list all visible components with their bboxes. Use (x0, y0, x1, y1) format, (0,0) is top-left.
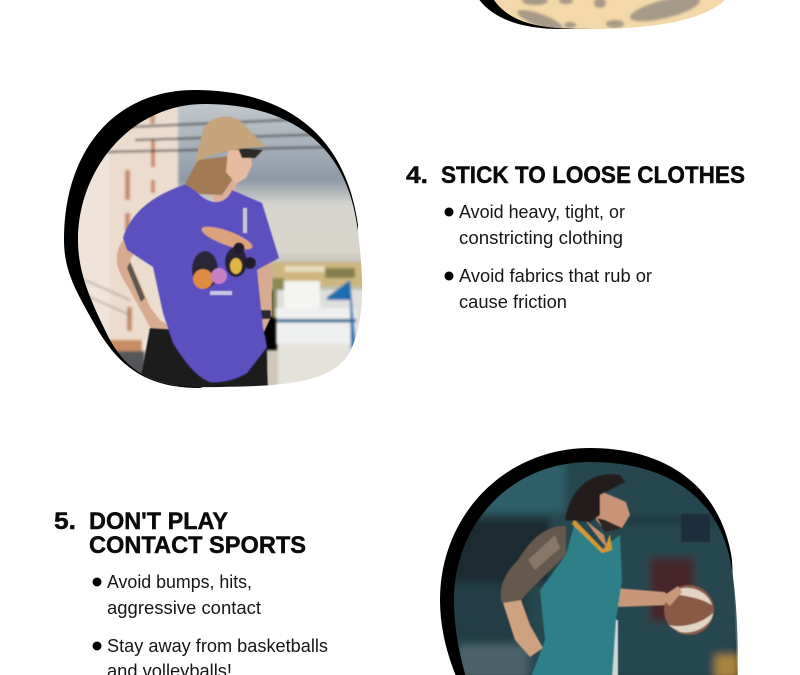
heading: 5. don't play contact sports: DON'T PLAY (89, 508, 228, 535)
bullet list: clothing advice: constricting clothing (459, 228, 623, 248)
bullet list: sports advice (92, 572, 328, 675)
arms (116, 240, 168, 330)
bullet list: sports advice: aggressive contact (107, 598, 261, 618)
sign (681, 514, 710, 542)
white stripe behind shorts (612, 619, 619, 675)
hair and face (185, 155, 238, 195)
forearm to ball (615, 588, 672, 607)
hand on ball (665, 586, 682, 606)
heading: 5. don't play contact sports: 5. (54, 508, 76, 535)
heading: 5. don't play contact sports: CONTACT SPORTS (89, 532, 306, 559)
photo blob: basketball player dribbling (440, 448, 740, 675)
bullet list: clothing advice: Avoid fabrics that rub or (459, 266, 652, 286)
wires (105, 118, 340, 152)
heading: 5. don't play contact sports (54, 508, 306, 559)
bullet list: clothing advice: Avoid heavy, tight, or (459, 202, 625, 222)
sky (170, 100, 370, 290)
left building (78, 148, 179, 386)
top cropped photo blob: sand (480, 0, 725, 29)
tattooed arm (501, 526, 566, 603)
bucket hat (195, 117, 266, 162)
shirt graphic (200, 226, 254, 250)
pants (138, 328, 268, 392)
bullet list: clothing advice: cause friction (459, 292, 567, 312)
heading: 4. stick to loose clothes: 4. (406, 162, 428, 189)
basketball (664, 585, 714, 635)
town buildings (274, 288, 362, 356)
head and hair (596, 490, 630, 530)
bullet list: sports advice: Avoid bumps, hits, (107, 572, 252, 592)
photo blob: person in purple t-shirt and bucket hat (64, 90, 372, 392)
neck (210, 179, 237, 202)
jersey (530, 522, 622, 675)
distant town (272, 262, 367, 286)
shirt (123, 183, 279, 382)
bullet list: sports advice: Stay away from basketballs (107, 636, 328, 656)
wires on building (85, 280, 130, 315)
bullet list: clothing advice (444, 202, 652, 312)
heading: 4. stick to loose clothes: STICK TO LOOSE CLOTHES (441, 162, 745, 189)
